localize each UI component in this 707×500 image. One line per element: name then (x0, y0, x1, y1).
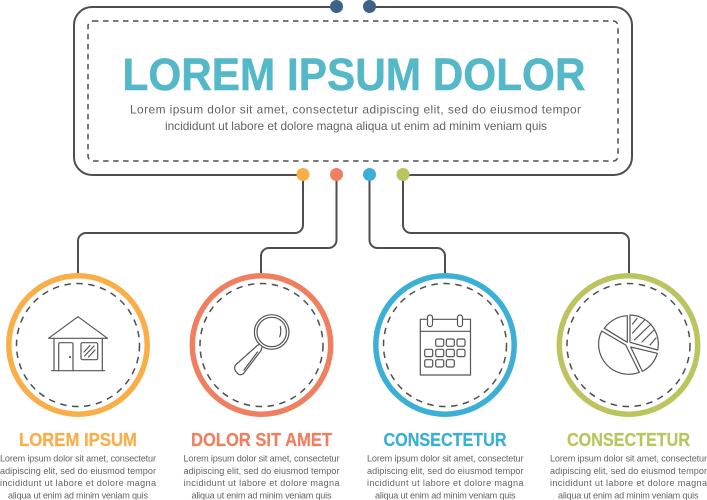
title: LOREM IPSUM DOLOR (122, 49, 586, 100)
description (184, 454, 340, 500)
panel: header frame (74, 7, 632, 175)
description: adipiscing elit, sed do eiusmod tempor (184, 466, 340, 476)
heading: CONSECTETUR (567, 430, 690, 450)
panel: dolor sit amet (184, 276, 340, 500)
header description (130, 102, 581, 133)
description: adipiscing elit, sed do eiusmod tempor (550, 466, 707, 476)
header description: Lorem ipsum dolor sit amet, consectetur adipiscing elit, sed do eiusmod tempor (130, 102, 581, 116)
description (0, 454, 157, 500)
icon: calendar (420, 315, 470, 375)
description: Lorem ipsum dolor sit amet, consectetur (367, 454, 524, 464)
description: Lorem ipsum dolor sit amet, consectetur (184, 454, 340, 464)
top connector dots (330, 0, 376, 13)
panel: consectetur blue (367, 276, 524, 500)
description: Lorem ipsum dolor sit amet, consectetur (550, 454, 707, 464)
connector lines (78, 175, 629, 273)
description: Lorem ipsum dolor sit amet, consectetur (0, 454, 156, 464)
heading: LOREM IPSUM (19, 430, 137, 450)
panel: consectetur green (550, 276, 707, 500)
description (367, 454, 524, 500)
icon: house (48, 317, 108, 371)
icon: magnifying glass (235, 315, 289, 375)
header description: incididunt ut labore et dolore magna aliqua ut enim ad minim veniam quis (165, 119, 547, 133)
description: incididunt ut labore et dolore magna (367, 478, 524, 488)
panel: lorem ipsum (0, 276, 157, 500)
description (550, 454, 707, 500)
description: incididunt ut labore et dolore magna (550, 478, 707, 488)
description: incididunt ut labore et dolore magna (184, 478, 340, 488)
bottom connector dots (296, 168, 410, 181)
description: adipiscing elit, sed do eiusmod tempor (367, 466, 524, 476)
description: incididunt ut labore et dolore magna (0, 478, 157, 488)
description: adipiscing elit, sed do eiusmod tempor (0, 466, 156, 476)
heading: DOLOR SIT AMET (191, 430, 332, 450)
icon: pie chart (599, 315, 658, 374)
heading: CONSECTETUR (384, 430, 506, 450)
